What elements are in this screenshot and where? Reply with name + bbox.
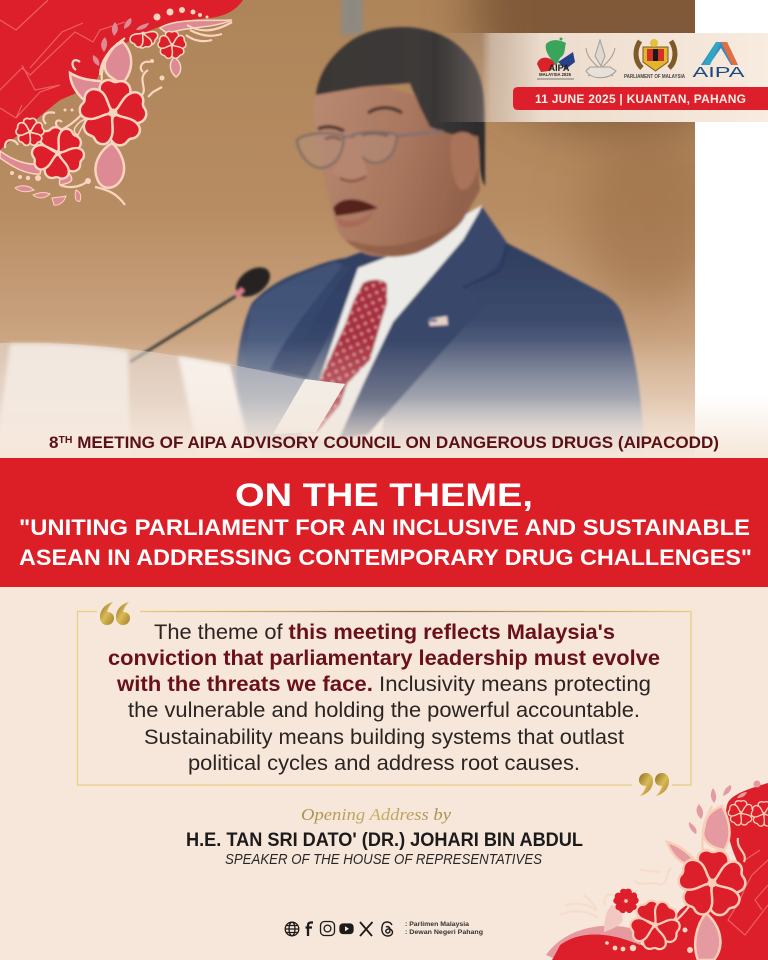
icon: threads	[382, 922, 392, 936]
flower: upper right cluster	[727, 801, 768, 827]
flower: small hibiscus top-left	[15, 118, 45, 147]
top-left floral corner	[0, 0, 243, 205]
quote text	[108, 621, 660, 775]
logo: AIPA Malaysia 2025: MALAYSIA 2025	[539, 72, 572, 77]
pale leaf behind small flower	[604, 905, 623, 932]
quote text: with the threats we face. Inclusivity means protecting	[116, 673, 651, 696]
logo: crossed keris crest	[586, 40, 616, 78]
quote text: political cycles and address root causes.	[188, 752, 580, 775]
icon: closing quotation mark	[639, 773, 669, 796]
theme heading: ON THE THEME,	[235, 477, 533, 513]
icon: globe	[285, 922, 299, 936]
meeting title: MEETING OF AIPA ADVISORY COUNCIL ON DANGEROUS DRUGS (AIPACODD)	[72, 434, 719, 452]
social media handles: : Parlimen Malaysia	[405, 921, 469, 928]
flower: medium hibiscus bottom-right	[629, 898, 682, 949]
top-right event banner	[435, 33, 768, 122]
logo: AIPA	[692, 42, 744, 81]
flower: medium hibiscus top-left	[30, 125, 86, 179]
meeting title: 8	[49, 434, 58, 452]
theme line one: "UNITING PARLIAMENT FOR AN INCLUSIVE AND SUSTAINABLE	[19, 515, 750, 540]
logo: AIPA Malaysia 2025: AIPA	[549, 63, 570, 73]
social media handles	[405, 921, 483, 936]
flower: small hibiscus bottom-right	[612, 889, 640, 914]
social media icons	[285, 922, 392, 936]
logo: Parliament of Malaysia crest: PARLIAMENT OF MALAYSIA	[624, 74, 685, 80]
flower: large hibiscus top-left	[77, 79, 148, 149]
date and location pill	[513, 87, 768, 110]
icon: youtube	[340, 924, 353, 934]
speaker title: SPEAKER OF THE HOUSE OF REPRESENTATIVES	[225, 852, 542, 868]
quote text: the vulnerable and holding the powerful accountable.	[128, 699, 640, 722]
opening address label: Opening Address by	[301, 805, 451, 824]
flower: upper small cluster	[128, 27, 187, 60]
quote text: Sustainability means building systems that outlast	[144, 726, 624, 749]
social media handles: : Dewan Negeri Pahang	[405, 929, 483, 936]
quote panel frame	[78, 612, 691, 785]
red theme band	[0, 458, 768, 587]
bottom-right floral corner	[546, 780, 768, 960]
logo: Parliament of Malaysia crest	[624, 39, 685, 80]
logo: AIPA Malaysia 2025	[537, 38, 575, 79]
speaker photo	[0, 0, 695, 446]
quote text: conviction that parliamentary leadership must evolve	[108, 647, 660, 670]
icon: instagram	[320, 922, 334, 936]
quote text: The theme of this meeting reflects Malaysia's	[154, 621, 615, 644]
theme line two: ASEAN IN ADDRESSING CONTEMPORARY DRUG CHALLENGES"	[19, 545, 752, 570]
meeting title: TH	[58, 435, 72, 446]
icon: X	[360, 922, 372, 936]
lectern glass	[0, 341, 345, 444]
flower: large hibiscus bottom-right	[676, 850, 747, 919]
date and location pill: 11 JUNE 2025 | KUANTAN, PAHANG	[535, 92, 746, 106]
icon: opening quotation mark	[100, 602, 130, 625]
icon: facebook	[306, 922, 313, 936]
white strip right of photo	[695, 0, 768, 458]
speaker name: H.E. TAN SRI DATO' (DR.) JOHARI BIN ABDUL	[186, 829, 583, 851]
logo: AIPA: AIPA	[692, 64, 744, 81]
